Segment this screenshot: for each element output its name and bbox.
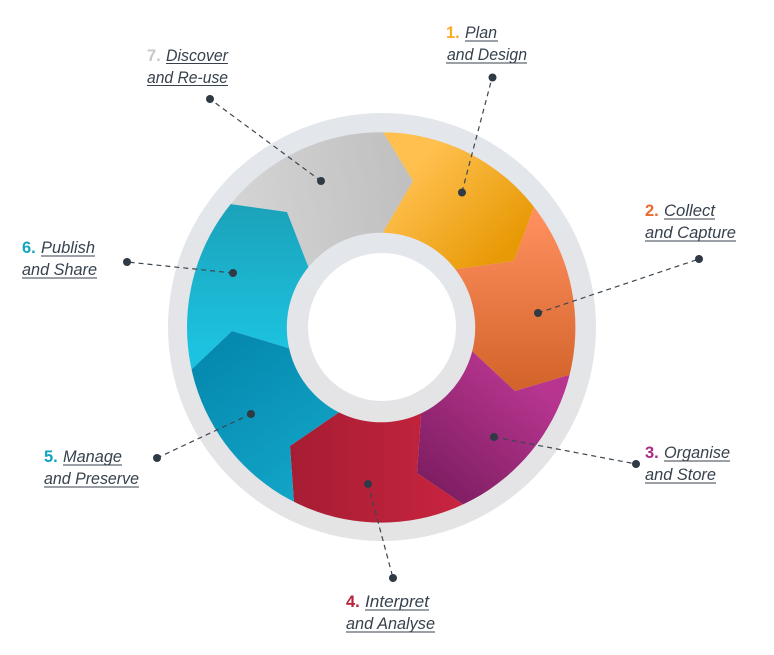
label 5: manage and preserve <box>44 448 139 488</box>
centre hole <box>308 253 456 401</box>
label 7: discover and re-use: and Re-use <box>147 69 228 87</box>
label 7: discover and re-use <box>147 47 229 87</box>
coloured cycle segments <box>187 132 576 523</box>
label 6: publish and share: and Share <box>22 261 97 279</box>
connector 2 <box>534 255 703 317</box>
label 5: manage and preserve: 5. <box>44 448 58 466</box>
label 3: organise and store: and Store <box>645 466 716 484</box>
label 1: plan and design <box>446 24 527 64</box>
label 2: collect and capture: 2. <box>645 202 659 220</box>
label 4: interpret and analyse: and Analyse <box>346 615 435 633</box>
connector 7 <box>206 95 325 185</box>
label 3: organise and store: Organise <box>664 444 730 462</box>
label 7: discover and re-use: 7. <box>147 47 161 65</box>
label 1: plan and design: Plan <box>465 24 497 42</box>
label 1: plan and design: and Design <box>447 46 527 64</box>
connector 6 <box>123 258 237 277</box>
label 5: manage and preserve: Manage <box>63 448 122 466</box>
label 4: interpret and analyse <box>346 593 435 633</box>
label 2: collect and capture: Collect <box>664 202 716 220</box>
segment 3: organise and store <box>417 351 570 504</box>
label 6: publish and share <box>22 239 97 279</box>
label 3: organise and store: 3. <box>645 444 659 462</box>
label 4: interpret and analyse: Interpret <box>365 593 430 611</box>
label 3: organise and store <box>645 444 730 484</box>
connector 4 <box>364 480 397 582</box>
label 6: publish and share: 6. <box>22 239 36 257</box>
connector 1 <box>458 74 496 196</box>
outer ring <box>168 113 596 541</box>
inner ring <box>287 233 475 422</box>
label 1: plan and design: 1. <box>446 24 460 42</box>
connector 5 <box>153 410 255 462</box>
segment 2: collect and capture <box>455 207 576 391</box>
segment 4: interpret and analyse <box>290 412 463 523</box>
label 6: publish and share: Publish <box>41 239 95 257</box>
label 7: discover and re-use: Discover <box>166 47 229 65</box>
label 5: manage and preserve: and Preserve <box>44 470 139 488</box>
segment 7: discover and re-use <box>231 132 413 267</box>
label 2: collect and capture: and Capture <box>645 224 736 242</box>
segment 5: manage and preserve <box>192 331 339 502</box>
label 2: collect and capture <box>645 202 736 242</box>
connector 3 <box>490 433 640 468</box>
label 4: interpret and analyse: 4. <box>346 593 360 611</box>
segment 1: plan and design <box>382 132 534 270</box>
segment 6: publish and share <box>187 204 308 370</box>
